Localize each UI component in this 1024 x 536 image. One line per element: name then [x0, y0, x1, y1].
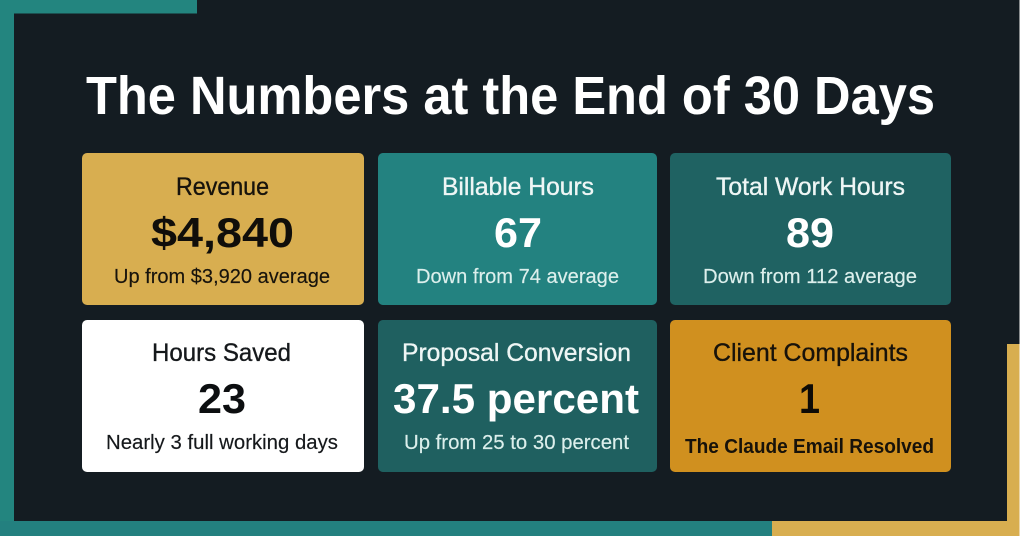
total work hours note: Down from 112 average	[703, 265, 917, 288]
client complaints label: Client Complaints	[713, 339, 908, 367]
hours saved value: 23	[198, 375, 246, 422]
client complaints value: 1	[799, 375, 820, 422]
frame: teal bottom bar	[0, 521, 772, 536]
panel: billable hours	[378, 153, 657, 305]
panel: total work hours	[670, 153, 951, 305]
total work hours value: 89	[786, 209, 834, 256]
panel: proposal conversion	[378, 320, 657, 472]
title: The Numbers at the End of 30 Days	[86, 67, 935, 126]
billable hours note: Down from 74 average	[416, 265, 619, 288]
revenue label: Revenue	[176, 173, 269, 201]
hours saved label: Hours Saved	[152, 339, 291, 367]
revenue value: $4,840	[151, 209, 294, 256]
proposal conversion label: Proposal Conversion	[402, 339, 631, 367]
frame: teal top-left corner	[0, 0, 197, 536]
billable hours label: Billable Hours	[442, 173, 594, 201]
panel: hours saved	[82, 320, 364, 472]
revenue note: Up from $3,920 average	[114, 265, 330, 288]
billable hours value: 67	[494, 209, 542, 256]
proposal conversion value: 37.5 percent	[393, 375, 639, 422]
total work hours label: Total Work Hours	[716, 173, 905, 201]
proposal conversion note: Up from 25 to 30 percent	[404, 431, 629, 454]
hours saved note: Nearly 3 full working days	[106, 431, 338, 454]
frame: gold bottom-right corner	[772, 344, 1020, 536]
client complaints note: The Claude Email Resolved	[685, 436, 934, 458]
panel: revenue	[82, 153, 364, 305]
panel: client complaints	[670, 320, 951, 472]
